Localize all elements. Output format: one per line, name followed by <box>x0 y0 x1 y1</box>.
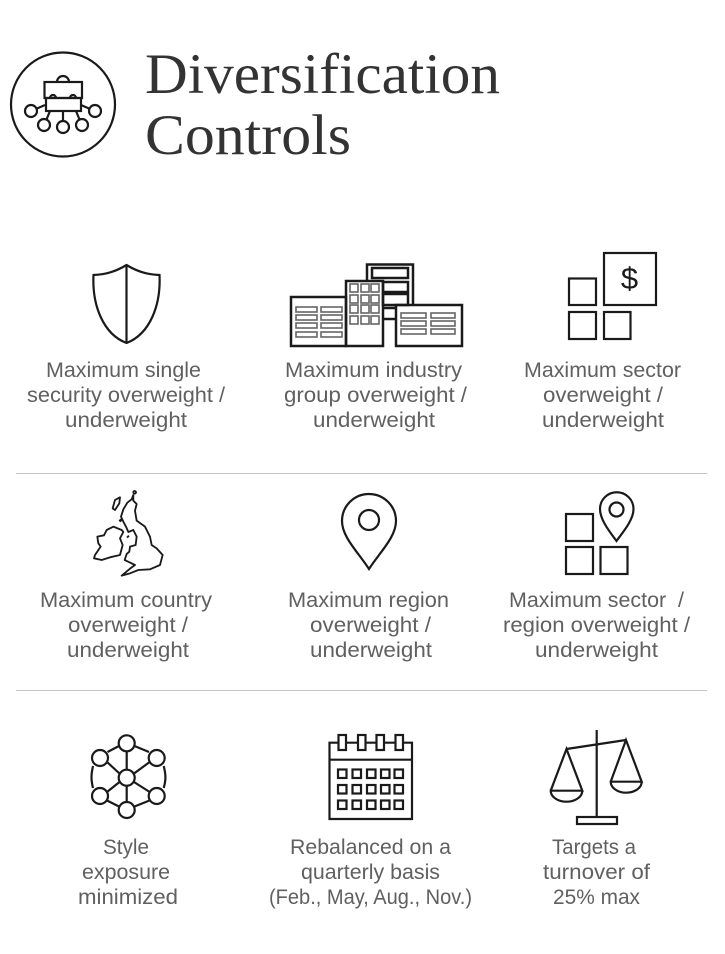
panel: style <box>78 735 178 909</box>
icon: buildings <box>291 264 462 346</box>
label: minimized <box>78 886 178 909</box>
divider <box>16 473 707 474</box>
label <box>40 589 213 662</box>
label: Targets a <box>552 836 636 859</box>
panel: sector <box>524 253 681 432</box>
label: region overweight / <box>503 614 690 637</box>
label: overweight / <box>543 384 663 407</box>
label <box>284 359 467 432</box>
divider <box>16 690 707 691</box>
label: exposure <box>82 861 170 884</box>
icon: map pin <box>342 494 396 569</box>
title: Diversification <box>145 43 500 106</box>
panel: country <box>40 491 213 662</box>
panel: sector and region <box>503 492 690 662</box>
label: overweight / <box>68 614 188 637</box>
label: underweight <box>65 409 187 432</box>
panel: region <box>288 494 449 662</box>
label: underweight <box>542 409 664 432</box>
label: Maximum sector / <box>509 589 684 612</box>
label: Maximum industry <box>285 359 463 382</box>
label <box>288 589 449 662</box>
label: underweight <box>310 639 432 662</box>
label <box>524 359 681 432</box>
label <box>503 589 690 662</box>
label: underweight <box>67 639 189 662</box>
label: security overweight / <box>27 384 225 407</box>
icon: briefcase network <box>11 52 115 156</box>
panel: industry group <box>284 264 467 432</box>
label: (Feb., May, Aug., Nov.) <box>269 886 472 909</box>
label: Style <box>103 836 149 859</box>
label: 25% max <box>553 886 640 909</box>
icon: squares with dollar <box>569 253 656 339</box>
label <box>269 836 472 909</box>
panel: rebalancing <box>269 735 472 909</box>
label: Maximum region <box>288 589 449 612</box>
icon: UK map <box>94 491 163 576</box>
header <box>11 43 500 167</box>
label: Maximum sector <box>524 359 681 382</box>
label: Rebalanced on a <box>290 836 451 859</box>
label: group overweight / <box>284 384 467 407</box>
panel: single security <box>27 265 225 432</box>
icon: squares with dollar: $ <box>621 261 638 296</box>
label: underweight <box>313 409 435 432</box>
panel: turnover <box>543 730 650 909</box>
icon: scales <box>551 730 642 824</box>
title: Controls <box>145 104 351 167</box>
label: Maximum country <box>40 589 213 612</box>
label: Maximum single <box>46 359 201 382</box>
title <box>145 43 500 167</box>
icon: squares with pin <box>566 492 634 574</box>
label: underweight <box>535 639 658 662</box>
label <box>543 836 650 909</box>
icon: shield <box>93 265 160 343</box>
label <box>78 836 178 909</box>
icon: network hexagon <box>92 735 165 818</box>
label <box>27 359 225 432</box>
label: quarterly basis <box>301 861 440 884</box>
icon: calendar <box>330 735 412 819</box>
label: turnover of <box>543 861 650 884</box>
label: overweight / <box>310 614 431 637</box>
